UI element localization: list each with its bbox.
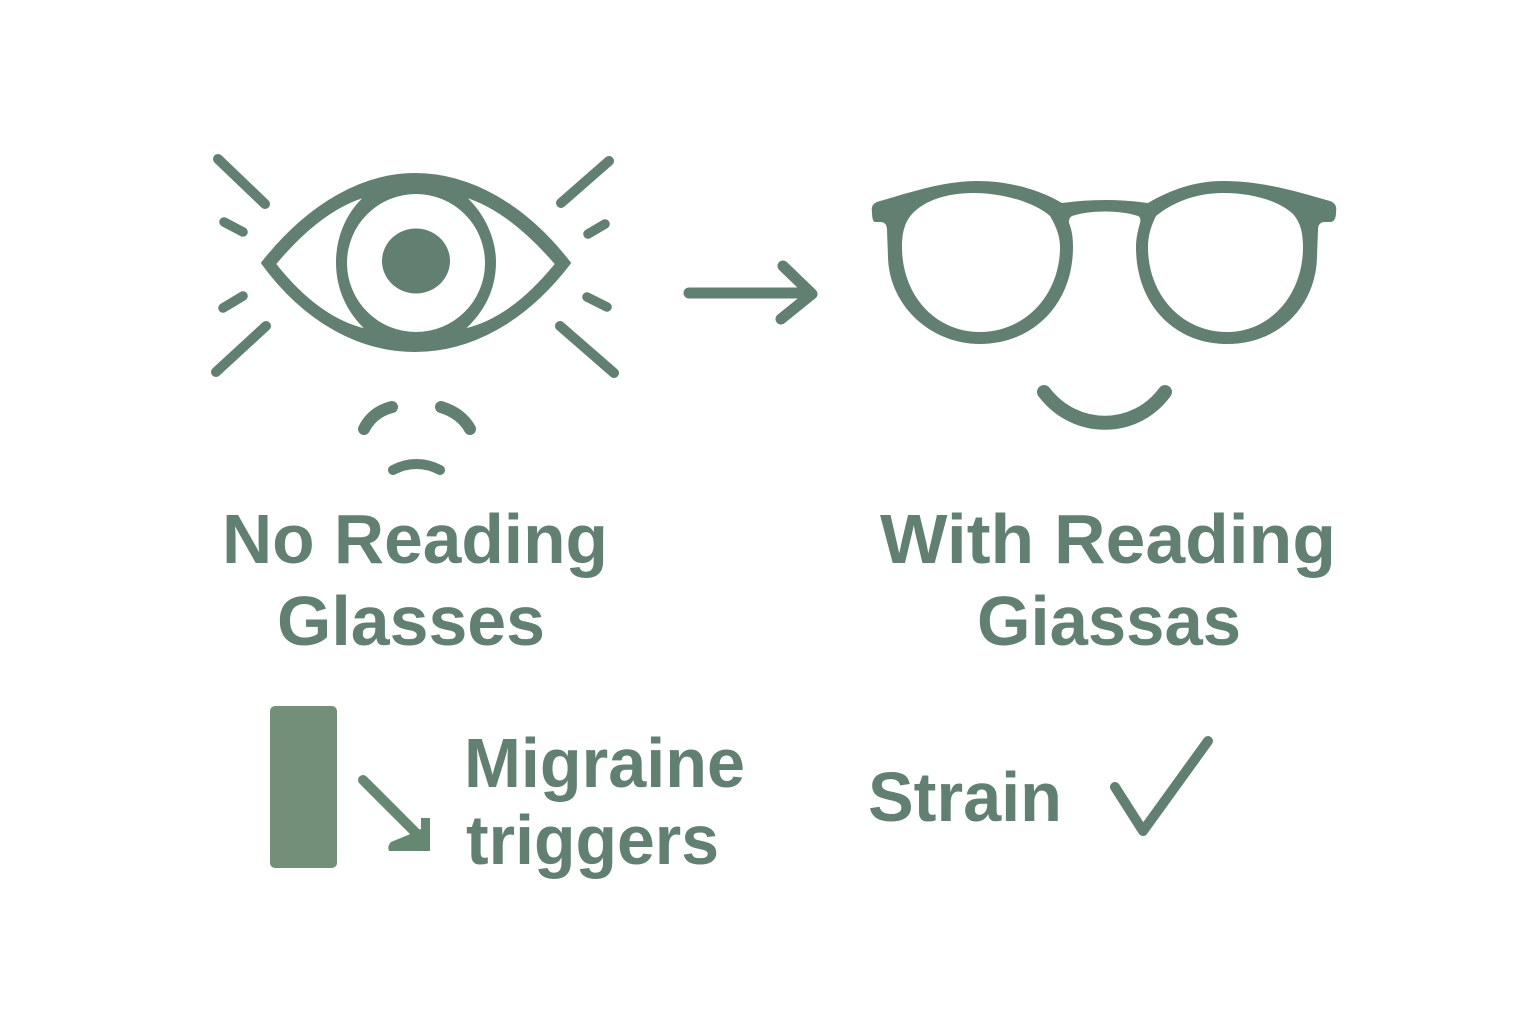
arrow: decreasing triggers (363, 780, 430, 851)
heading: with reading glasses: Giassas (977, 582, 1241, 660)
arrow: before to after (689, 266, 812, 319)
label: migraine triggers: Migraine (464, 724, 745, 802)
label: migraine triggers: triggers (466, 801, 719, 879)
icon: check mark (1115, 741, 1208, 831)
heading: with reading glasses: With Reading (880, 500, 1336, 578)
label: migraine triggers (464, 724, 745, 879)
icon: smile (1044, 392, 1165, 423)
icon: reading glasses (872, 181, 1336, 344)
heading: no reading glasses: Glasses (277, 582, 545, 660)
heading: no reading glasses (222, 500, 608, 660)
icon: strained eye (216, 159, 614, 373)
icon: trigger bar (270, 706, 337, 868)
heading: with reading glasses (880, 500, 1336, 660)
heading: no reading glasses: No Reading (222, 500, 608, 578)
icon: sad face (364, 407, 470, 470)
label: strain: Strain (868, 758, 1062, 836)
